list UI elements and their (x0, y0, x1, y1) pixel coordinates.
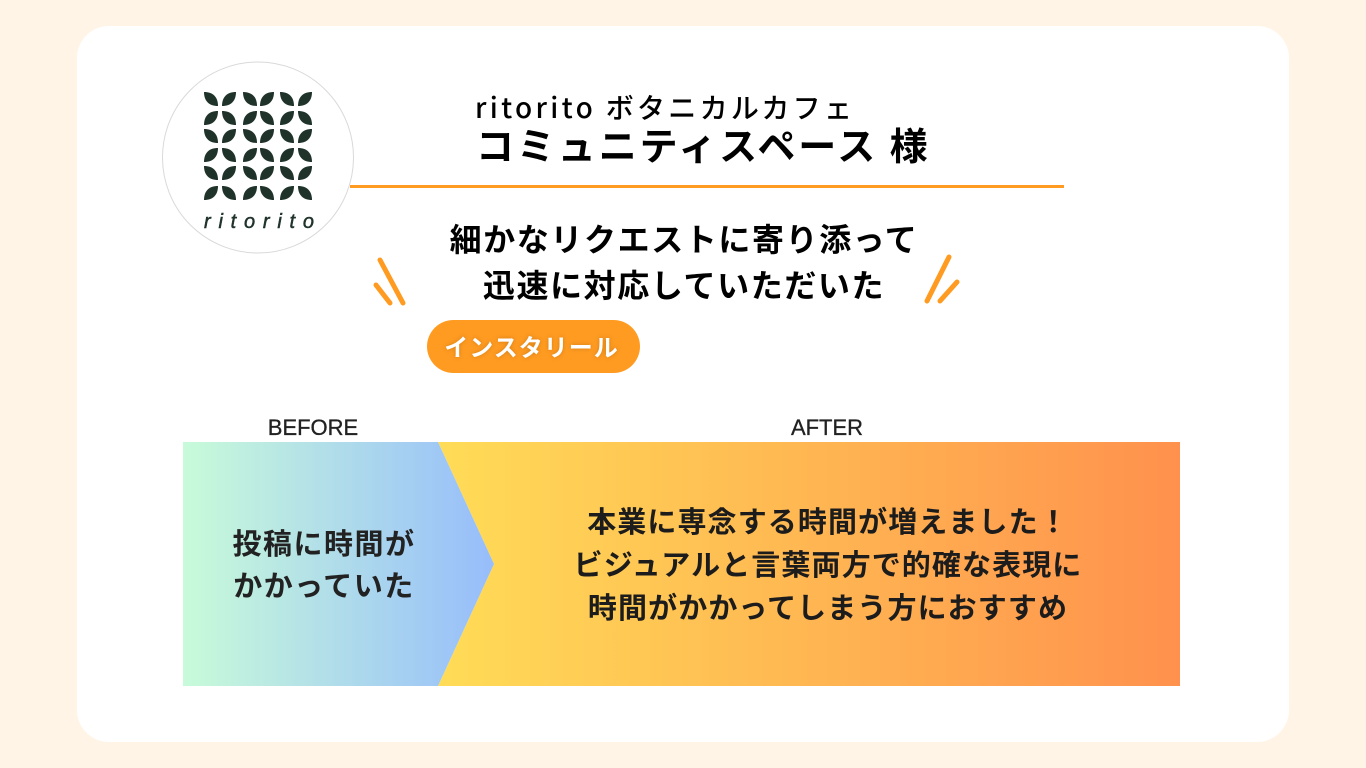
logo: ritorito circle: ritorito (204, 211, 314, 233)
icon: right emphasis strokes (924, 254, 960, 304)
tag: Instagram reels pill: インスタリール (444, 328, 619, 363)
chart: before and after arrow banner (183, 442, 1180, 686)
divider line (350, 185, 1064, 188)
label: after: AFTER (791, 415, 863, 440)
text: after description: ビジュアルと言葉両方で的確な表現に (574, 542, 1082, 584)
text: before description (232, 521, 416, 605)
heading: testimonial quote (450, 215, 918, 307)
text: before description: 投稿に時間が (232, 521, 416, 563)
tag: Instagram reels pill (427, 320, 640, 373)
text: after description: 時間がかかってしまう方におすすめ (588, 585, 1068, 627)
heading: client name line 1: ritorito ボタニカルカフェ (475, 87, 855, 127)
heading: testimonial quote: 細かなリクエストに寄り添って (450, 215, 918, 261)
heading: client name line 2: コミュニティスペース 様 (476, 116, 931, 171)
logo: ritorito circle (162, 62, 354, 254)
text: after description (574, 499, 1082, 627)
icon: left emphasis strokes (374, 258, 406, 306)
label: before: BEFORE (268, 415, 358, 440)
text: before description: かかっていた (233, 563, 415, 605)
text: after description: 本業に専念する時間が増えました！ (587, 499, 1069, 541)
heading: testimonial quote: 迅速に対応していただいた (483, 261, 885, 307)
